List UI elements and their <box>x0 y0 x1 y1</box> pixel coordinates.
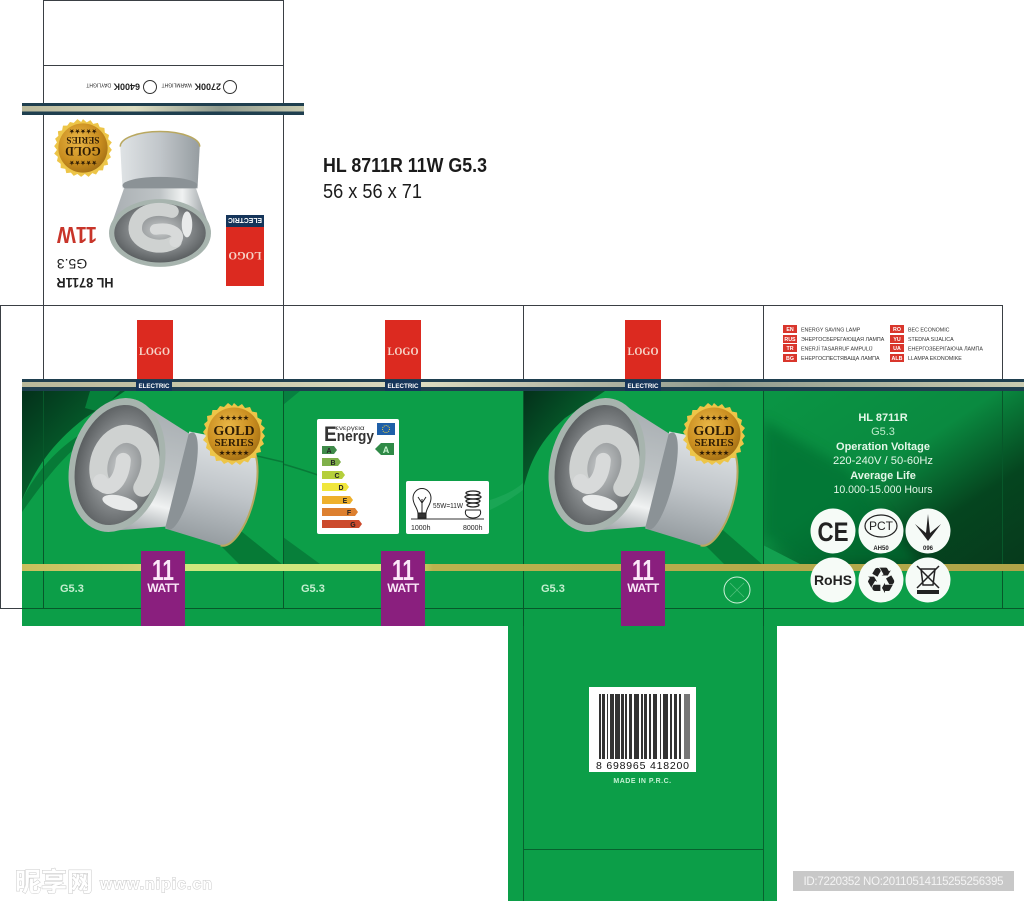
image id stamp <box>793 871 1014 891</box>
decorative band top flap <box>22 103 304 115</box>
wattage badge panel 1 <box>141 551 185 626</box>
logo top flap: ELECTRIC <box>228 216 262 223</box>
logo panel 3: LOGO <box>628 344 658 358</box>
logo panel 1 <box>136 320 173 391</box>
base type labels: G5.3 <box>541 583 565 595</box>
energy label: ενεργεια <box>336 425 365 432</box>
gold series seal top flap <box>54 119 112 177</box>
language list: ALB <box>892 356 903 362</box>
certification icons <box>810 508 950 602</box>
icon: Ukraine mark: 096 <box>923 546 934 552</box>
language list: TR <box>786 346 794 352</box>
wattage badge panel 1: WATT <box>147 581 180 595</box>
product lamp panel 1 <box>55 388 270 565</box>
specifications text: 220-240V / 50-60Hz <box>833 455 933 467</box>
image id stamp: ID:7220352 NO:20110514115255256395 <box>804 876 1004 888</box>
panel: bottom flap <box>508 626 777 901</box>
specifications text: Operation Voltage <box>836 441 930 453</box>
logo panel 2: LOGO <box>388 344 418 358</box>
made in label: MADE IN P.R.C. <box>613 778 672 785</box>
gold series seal top flap: SERIES <box>66 134 100 144</box>
colour temperature options: 2700K WARMLIGHT <box>162 82 221 92</box>
language list: UA <box>893 346 901 352</box>
watermark: 昵享网 <box>15 867 93 897</box>
specifications text: 10.000-15.000 Hours <box>834 484 933 496</box>
product lamp panel 3 <box>535 388 750 565</box>
gold series seal panel 3: ★★★★★ <box>699 450 729 457</box>
base type labels: G5.3 <box>60 583 84 595</box>
icon: RoHS: RoHS <box>814 572 852 588</box>
energy rating bars: D <box>338 485 344 492</box>
wattage badge panel 2: 11 <box>392 555 414 587</box>
specifications text: HL 8711R <box>858 412 908 424</box>
wattage badge panel 1: 11 <box>152 555 174 587</box>
language list: EN <box>786 327 794 333</box>
language list: ЕНЕРГОСПЕСТЯВАЩА ЛАМПА <box>801 356 880 362</box>
gold series seal top flap: ★★★★★ <box>69 159 97 165</box>
energy rating bars: E <box>343 498 348 505</box>
logo panel 3: ELECTRIC <box>628 383 659 390</box>
barcode: 8 698965 418200 <box>596 760 689 772</box>
language list: BG <box>786 356 794 362</box>
logo top flap: LOGO <box>228 249 262 263</box>
logo top flap <box>226 215 264 286</box>
energy rating bars: G <box>350 522 356 529</box>
watermark <box>15 867 212 897</box>
gold series seal panel 1: ★★★★★ <box>219 450 249 457</box>
energy rating bars: F <box>347 510 352 517</box>
colour temperature options: 6400K DAYLIGHT <box>86 82 140 92</box>
lamp comparison box: 55W=11W <box>433 503 463 510</box>
title: 56 x 56 x 71 <box>323 181 422 203</box>
icon: CE mark: CE <box>818 517 848 547</box>
gold series seal top flap: GOLD <box>65 144 101 158</box>
specifications text <box>833 412 933 496</box>
panel: side tabs outline <box>0 305 1002 608</box>
icon: spiral lamp <box>465 491 481 518</box>
panel: green box body <box>22 391 1024 626</box>
lamp comparison box: 1000h <box>411 525 431 532</box>
title <box>323 155 487 203</box>
energy rating bars: C <box>334 473 340 480</box>
language list: BEC ECONOMIC <box>908 328 950 334</box>
title: HL 8711R 11W G5.3 <box>323 155 487 177</box>
language list: RUS <box>784 337 796 343</box>
logo panel 1: LOGO <box>139 344 170 358</box>
icon: PCT mark: PCT <box>869 519 894 533</box>
gold series seal panel 1: SERIES <box>214 437 254 449</box>
product lamp top flap <box>109 131 211 267</box>
logo panel 2 <box>385 320 421 391</box>
gold series seal panel 1: GOLD <box>213 424 255 439</box>
colour temperature options <box>86 80 236 94</box>
language list: ЕНЕРГОЗБЕРІГАЮЧА ЛАМПА <box>908 346 983 352</box>
language list: RO <box>893 327 901 333</box>
panel: top flap <box>22 0 304 306</box>
lamp comparison box: 8000h <box>463 525 483 532</box>
icon: small circle mark <box>724 577 750 603</box>
wattage top flap: 11W <box>57 222 97 248</box>
base type top flap: G5.3 <box>57 256 87 272</box>
wattage badge panel 2 <box>381 551 425 626</box>
base type labels <box>60 583 565 595</box>
language list: ENERGY SAVING LAMP <box>801 328 861 334</box>
gold series seal panel 1 <box>203 403 265 465</box>
gold series seal panel 3: ★★★★★ <box>699 415 729 422</box>
icon: PCT mark: AH50 <box>873 546 889 552</box>
base type labels: G5.3 <box>301 583 325 595</box>
specifications text: Average Life <box>850 470 916 482</box>
energy rating bars: B <box>330 460 336 467</box>
gold series seal panel 1: ★★★★★ <box>219 415 249 422</box>
energy rating arrow: A <box>383 445 390 455</box>
wattage badge panel 3: 11 <box>632 555 654 587</box>
yellow stripe <box>22 564 1024 571</box>
gold series seal top flap: ★★★★★ <box>69 127 97 133</box>
model top flap: HL 8711R <box>56 275 114 291</box>
language list <box>783 325 983 362</box>
logo panel 1: ELECTRIC <box>138 383 170 390</box>
header band <box>22 379 1024 391</box>
gold series seal panel 3 <box>683 403 745 465</box>
icon: recycling: ♻ <box>865 561 897 602</box>
gold series seal panel 3: GOLD <box>693 424 735 439</box>
wattage badge panel 2: WATT <box>387 581 420 595</box>
icon: crossed bin <box>906 558 950 602</box>
barcode <box>589 687 696 772</box>
language list: ENERJİ TASARRUF AMPULÜ <box>801 346 873 352</box>
language list: STEDNA SIJALICA <box>908 337 954 343</box>
energy rating bars <box>322 446 362 529</box>
language list: YU <box>893 337 901 343</box>
logo panel 3 <box>625 320 661 391</box>
icon: incandescent bulb <box>413 489 431 518</box>
specifications text: G5.3 <box>871 426 895 438</box>
energy label: Energy <box>324 423 375 446</box>
wattage badge panel 3 <box>621 551 665 626</box>
wattage badge panel 3: WATT <box>627 581 660 595</box>
gold series seal panel 3: SERIES <box>694 437 734 449</box>
energy rating bars: A <box>326 448 332 455</box>
energy label <box>317 419 399 534</box>
fold lines on green <box>22 391 1024 626</box>
language list: LLAMPA EKONOMIKE <box>908 356 962 362</box>
lamp comparison box <box>406 481 489 534</box>
language list: ЭНЕРГОСБЕРЕГАЮЩАЯ ЛАМПА <box>801 337 885 343</box>
icon: PCT mark <box>858 508 904 554</box>
logo panel 2: ELECTRIC <box>388 383 419 390</box>
watermark: www.nipic.cn <box>99 876 212 893</box>
